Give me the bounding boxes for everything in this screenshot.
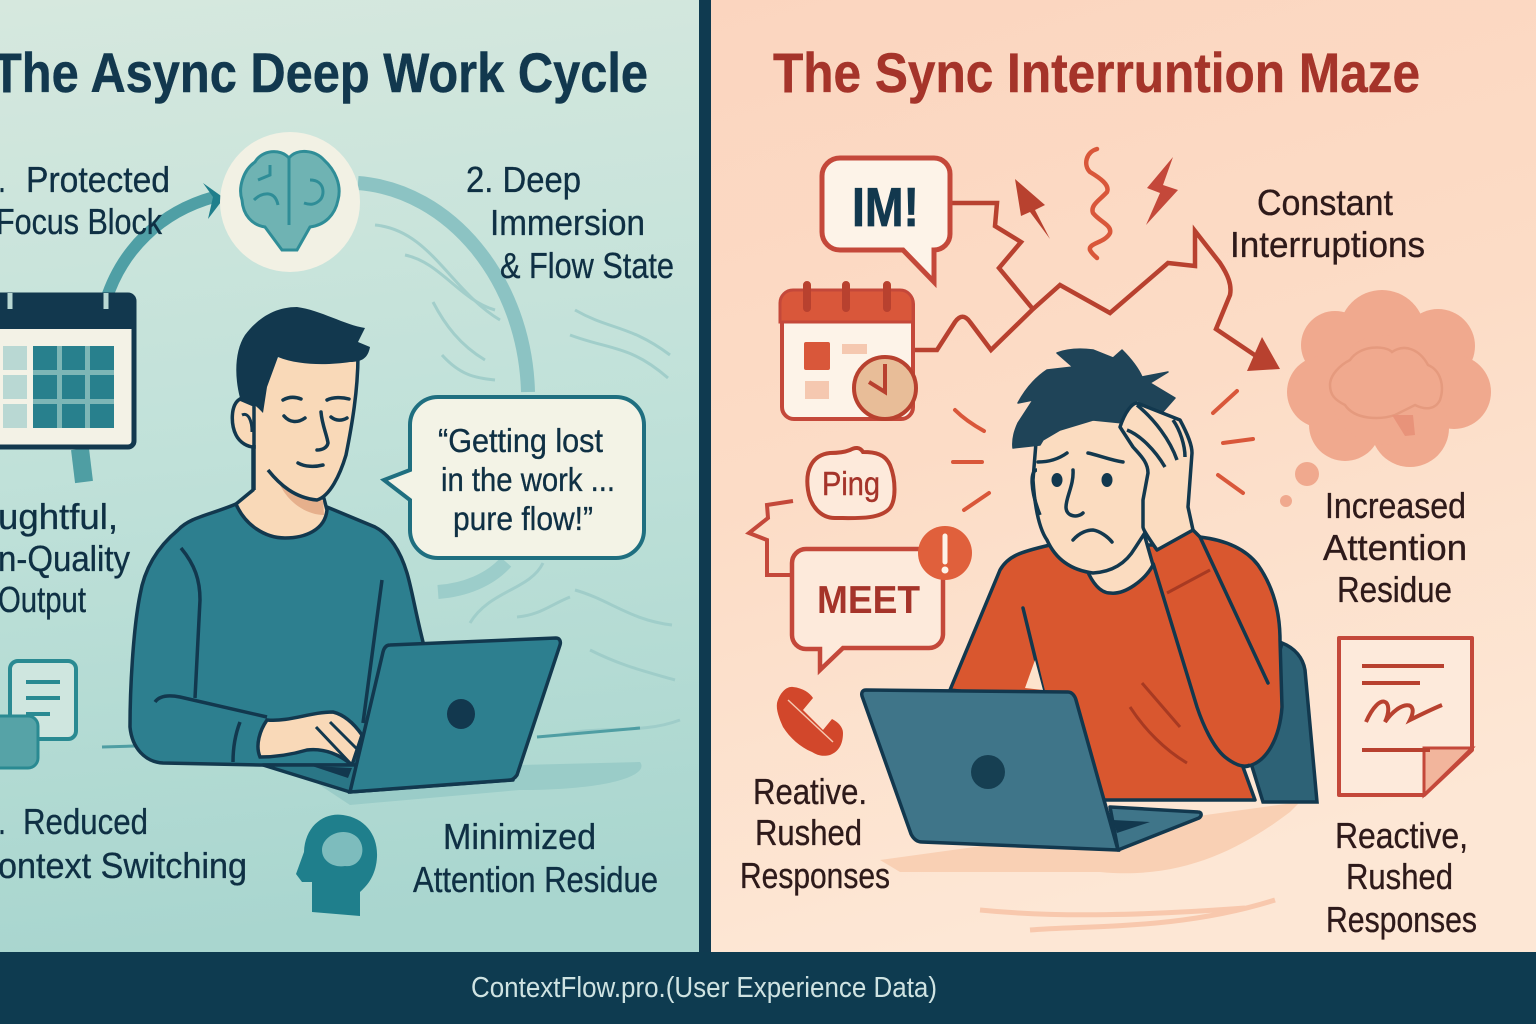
text: reactive rushed right: Reactive, (1335, 815, 1468, 856)
ear (1032, 470, 1040, 515)
text: reduced context switching: ontext Switching (0, 845, 247, 886)
text: minimized attention residue (413, 816, 658, 900)
icon: residue cloud (1280, 290, 1491, 507)
sweater creases (1130, 570, 1210, 763)
divider (699, 0, 711, 952)
sad face (1038, 453, 1123, 542)
text: reactive rushed right: Rushed (1346, 856, 1453, 897)
text: reduced context switching: Reduced (23, 801, 148, 842)
hand (258, 712, 362, 765)
arrow head: residue (1247, 337, 1280, 371)
neck (1087, 530, 1153, 593)
person: focused worker (130, 307, 423, 765)
text: step 1: Focus Block (0, 201, 163, 242)
text: step 2: & Flow State (500, 245, 674, 286)
icon: head (296, 815, 377, 916)
text: step 2 (466, 159, 674, 286)
text: reactive rushed left (740, 771, 890, 896)
connector line (749, 501, 793, 575)
sleeve lines (155, 548, 382, 762)
heading: sync: The Sync Interruntion Maze (773, 41, 1420, 104)
text: reactive rushed right (1326, 815, 1477, 940)
icon: ping bubble: Ping (822, 465, 880, 502)
text: increased attention residue (1323, 485, 1467, 610)
neck (236, 440, 345, 538)
icon: calendar with clock (780, 285, 916, 419)
text: output: n-Quality (0, 538, 130, 579)
icon: brain (220, 132, 360, 272)
hand on head (1120, 403, 1193, 550)
cycle arc: right side (358, 183, 528, 392)
desk scribble (980, 900, 1275, 930)
footer bar: ContextFlow.pro.(User Experience Data) (471, 972, 937, 1004)
desk line (102, 728, 640, 747)
text: reactive rushed left: Responses (740, 855, 890, 896)
text: constant interruptions: Interruptions (1230, 224, 1425, 265)
laptop shadow (300, 762, 642, 805)
desk shadow (880, 802, 1300, 873)
icon: lightning (1146, 157, 1178, 225)
sweater (130, 504, 423, 765)
stress marks (953, 391, 1253, 510)
icon: laptop (263, 638, 560, 792)
text: reactive rushed right: Responses (1326, 899, 1477, 940)
icon: arrow up (1015, 179, 1050, 239)
text: step 1: Protected (26, 159, 170, 200)
text: minimized attention residue: Attention Residue (413, 859, 658, 900)
text: increased attention residue: Increased (1325, 485, 1466, 526)
flow lines (375, 225, 680, 735)
sweater (950, 530, 1282, 800)
text: output (0, 496, 130, 620)
footer bar (0, 952, 1536, 1024)
text: output: Output (0, 579, 86, 620)
text: step 1 (0, 159, 170, 242)
text: reactive rushed left: Rushed (755, 812, 862, 853)
cycle arrow: calendar to brain (106, 183, 224, 300)
text: increased attention residue: Residue (1337, 569, 1452, 610)
zigzag interruption line (913, 203, 1262, 360)
icon: squiggle (1086, 149, 1110, 258)
chair (1250, 643, 1317, 802)
text: output: ughtful, (0, 496, 118, 537)
heading: async: The Async Deep Work Cycle (0, 41, 648, 104)
text: reactive rushed left: Reative. (753, 771, 867, 812)
icon: MEET bubble: MEET (817, 579, 920, 622)
text: constant interruptions (1230, 182, 1425, 265)
text: reduced context switching (0, 801, 247, 886)
icon: phone (777, 687, 843, 756)
icon: scribbled document (1339, 638, 1472, 795)
face (1033, 410, 1155, 573)
closed eyes, brows, nose, smile (283, 397, 349, 466)
arm (1153, 563, 1250, 766)
hair (236, 307, 370, 413)
ear (232, 399, 254, 447)
speech bubble: flow quote (384, 397, 644, 558)
person: stressed worker (950, 349, 1317, 802)
panel: sync interruption maze (711, 0, 1536, 952)
text: step 2: Immersion (490, 202, 645, 243)
speech bubble: flow quote: “Getting lost (438, 422, 603, 459)
text: constant interruptions: Constant (1257, 182, 1393, 223)
text: increased attention residue: Attention (1323, 527, 1467, 568)
icon: IM chat bubble (822, 158, 950, 282)
icon: MEET bubble (792, 526, 972, 670)
icon: calendar (0, 293, 134, 482)
cycle arc: below bubble (438, 562, 506, 592)
panel: async deep work cycle (0, 0, 699, 952)
icon: IM chat bubble: IM! (852, 176, 919, 238)
text: step 2: 2. Deep (466, 159, 581, 200)
face (254, 350, 359, 500)
collar wedge (1025, 660, 1043, 690)
icon: ping bubble (807, 448, 894, 518)
speech bubble: flow quote: in the work ... (441, 461, 615, 498)
speech bubble: flow quote: pure flow!” (453, 500, 593, 537)
icon: laptop (862, 690, 1201, 850)
icon: documents (0, 661, 76, 768)
text: minimized attention residue: Minimized (443, 816, 596, 857)
hair (1013, 349, 1175, 448)
